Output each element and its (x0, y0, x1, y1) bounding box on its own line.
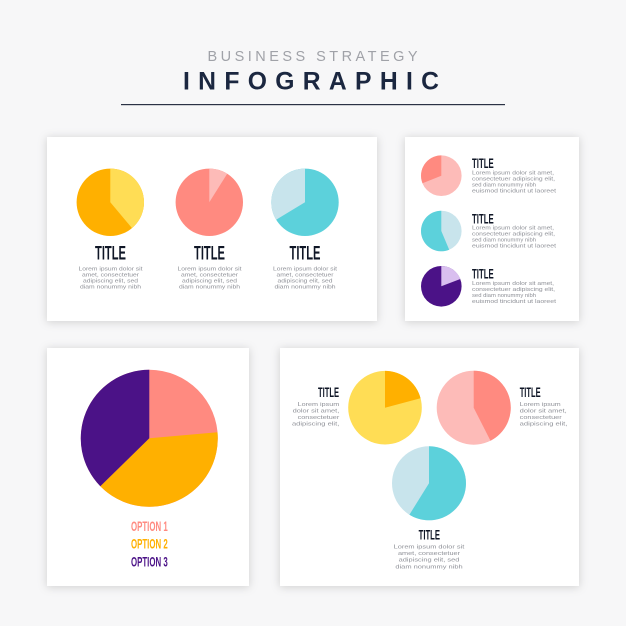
text block: right: dolor sit amet, (520, 408, 567, 414)
text block: coral pie: adipiscing elit, sed (182, 278, 237, 284)
legend: OPTION 3 (131, 553, 168, 569)
panel: stacked pies with text (405, 137, 579, 321)
panel: triangle of pies (280, 348, 579, 586)
text block: left: TITLE (318, 384, 339, 400)
title: INFOGRAPHIC (183, 68, 439, 95)
text block: right: consectetuer (520, 415, 562, 421)
text block: purple small: euismod tincidunt ut laoreet (472, 299, 557, 305)
text block: coral small: euismod tincidunt ut laoreet (472, 188, 557, 194)
pie: coral medium (437, 371, 511, 445)
text block: teal pie: adipiscing elit, sed (278, 278, 332, 284)
text block: left: adipiscing elit, (292, 422, 340, 428)
text block: coral pie: Lorem ipsum dolor sit (178, 266, 242, 272)
pie: teal medium (392, 446, 466, 520)
text block: bottom: adipiscing elit, sed (399, 558, 459, 564)
pie: teal (271, 169, 339, 236)
text block: coral pie: TITLE (194, 243, 225, 264)
text block: coral pie: diam nonummy nibh (179, 284, 240, 290)
legend (131, 518, 168, 569)
text block: coral small: TITLE (472, 155, 494, 171)
text block: purple small: Lorem ipsum dolor sit amet, (472, 281, 555, 287)
panel: large pie with options (47, 348, 249, 586)
text block: purple small: TITLE (472, 266, 494, 282)
text block: teal pie: amet, consectetuer (276, 272, 334, 278)
pie: coral small (421, 155, 462, 196)
text block: coral pie (178, 243, 242, 290)
text block: teal small: Lorem ipsum dolor sit amet, (472, 226, 555, 232)
text block: teal small: consectetuer adipiscing elit, (472, 232, 556, 238)
pie: yellow (77, 169, 144, 236)
pie: teal small (421, 211, 462, 251)
text block: coral small (472, 155, 557, 194)
text block: purple small: consectetuer adipiscing elit, (472, 287, 556, 293)
text block: right: Lorem ipsum (520, 402, 561, 408)
text block: left: Lorem ipsum (298, 402, 340, 408)
legend: OPTION 2 (131, 536, 168, 552)
text block: coral small: Lorem ipsum dolor sit amet, (472, 170, 555, 176)
header rule (121, 104, 505, 105)
text block: left (292, 384, 340, 428)
text block: coral small: consectetuer adipiscing elit, (472, 176, 556, 182)
text block: purple small: sed diam nonummy nibh (472, 293, 536, 299)
legend: OPTION 1 (131, 518, 168, 534)
text block: left: consectetuer (298, 415, 339, 421)
text block: yellow pie: adipiscing elit, sed (83, 278, 138, 284)
text block: bottom: TITLE (419, 526, 440, 542)
text block: teal small: TITLE (472, 210, 494, 226)
text block: right (520, 384, 568, 428)
text block: yellow pie: amet, consectetuer (82, 272, 139, 278)
text block: bottom: amet, consectetuer (398, 551, 460, 557)
text block: right: adipiscing elit, (520, 422, 568, 428)
text block: purple small (472, 266, 557, 305)
text block: bottom: diam nonummy nibh (395, 564, 463, 570)
text block: teal small: euismod tincidunt ut laoreet (472, 244, 557, 250)
panel: three pies in a row (47, 137, 377, 321)
text block: left: dolor sit amet, (293, 408, 340, 414)
subtitle: BUSINESS STRATEGY (208, 49, 418, 65)
text block: teal pie: diam nonummy nibh (274, 284, 336, 290)
text block: coral small: sed diam nonummy nibh (472, 182, 536, 188)
text block: bottom: Lorem ipsum dolor sit (394, 545, 465, 551)
text block: teal pie: TITLE (290, 243, 320, 264)
pie: purple small (421, 266, 462, 307)
text block: coral pie: amet, consectetuer (181, 272, 238, 278)
text block: teal small: sed diam nonummy nibh (472, 238, 536, 244)
header (121, 49, 505, 105)
text block: bottom (394, 526, 465, 570)
pie: yellow medium (348, 371, 422, 445)
text block: teal small (472, 210, 557, 250)
text block: yellow pie: diam nonummy nibh (80, 284, 141, 290)
text block: yellow pie (78, 243, 143, 290)
text block: teal pie: Lorem ipsum dolor sit (273, 266, 338, 272)
text block: yellow pie: TITLE (95, 243, 126, 264)
text block: teal pie (273, 243, 338, 290)
pie: coral (176, 169, 243, 236)
pie: three options (81, 370, 218, 507)
text block: right: TITLE (520, 384, 541, 400)
text block: yellow pie: Lorem ipsum dolor sit (78, 266, 143, 272)
